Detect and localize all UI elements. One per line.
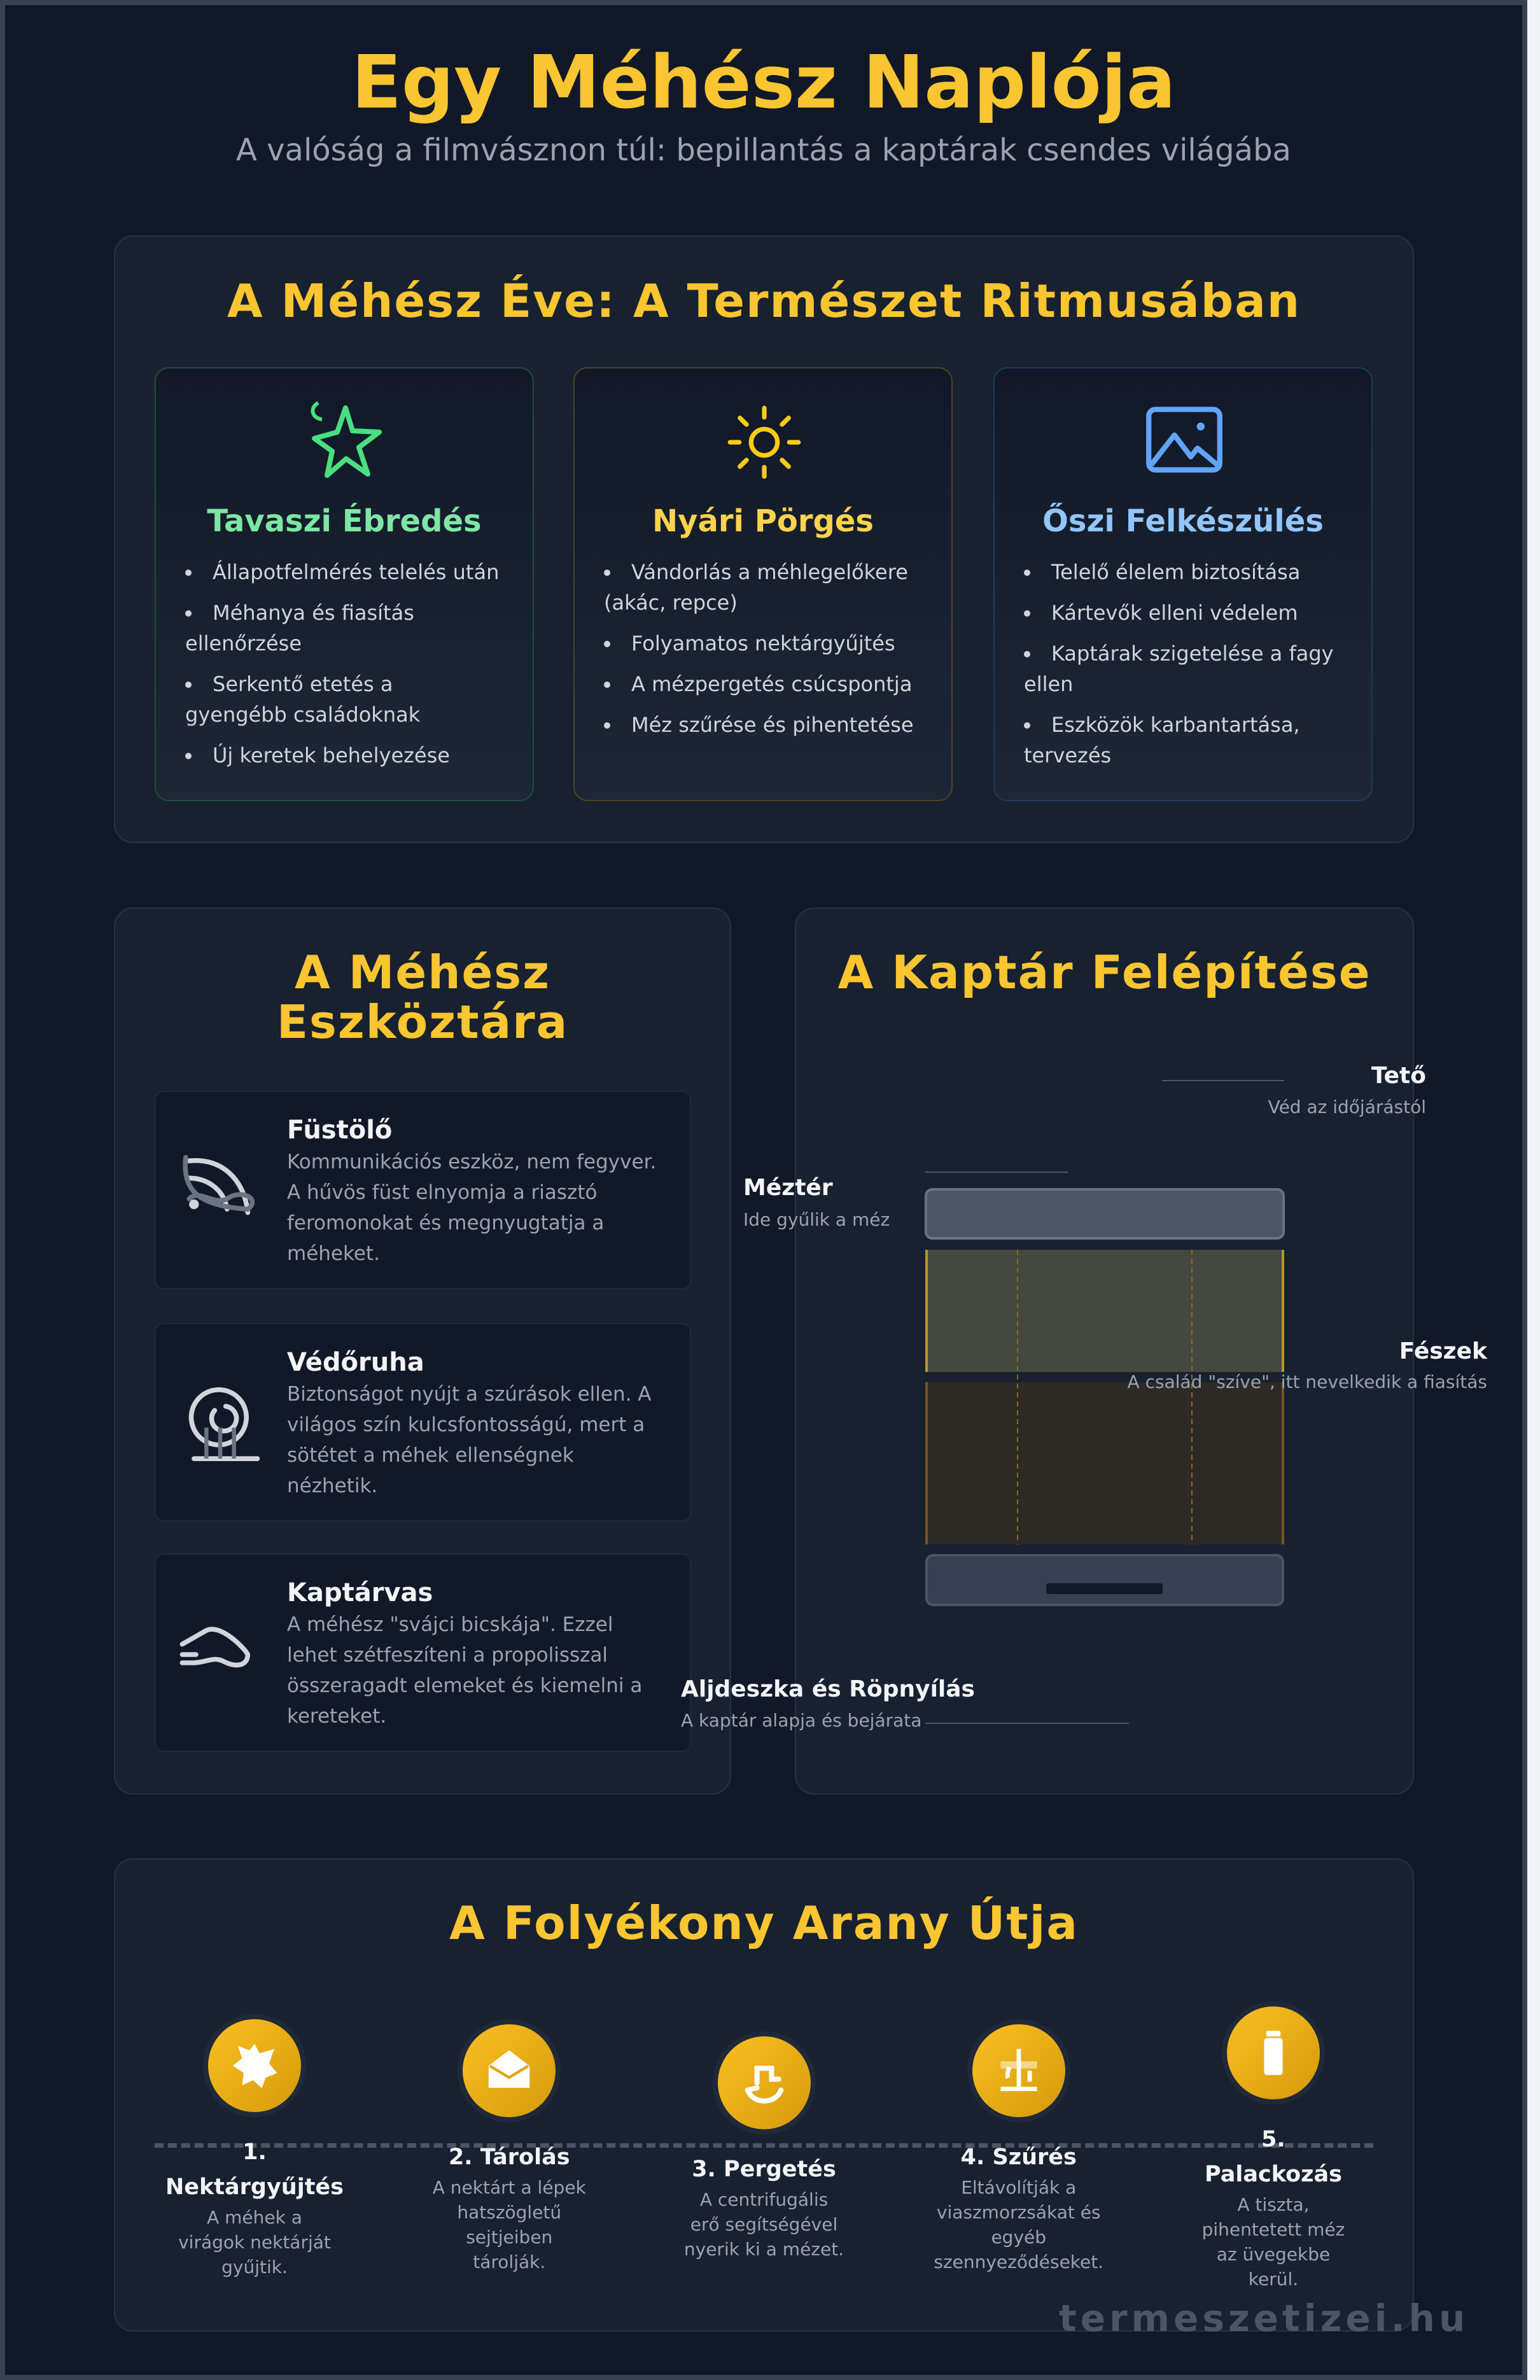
tool: suit: sötétet a méhek ellenségnek	[287, 1444, 574, 1467]
step 1: 1.	[242, 2139, 267, 2165]
step 2: hatszögletű	[457, 2202, 561, 2222]
tool: smoker: Füstölő	[287, 1116, 392, 1145]
text: Véd az időjárástól	[1268, 1096, 1426, 1117]
card: autumn: Telelő élelem biztosítása	[1051, 560, 1300, 584]
step 1: A méhek a	[207, 2207, 302, 2227]
icon: sun	[728, 406, 801, 479]
icon: sprout star	[311, 401, 382, 478]
step 2: tárolják.	[473, 2251, 545, 2272]
step 2: sejtjeiben	[466, 2226, 552, 2248]
tool: hive tool: Kaptárvas	[287, 1578, 433, 1607]
step 3: A centrifugális	[700, 2189, 828, 2210]
step 5: Palackozás	[1205, 2162, 1342, 2187]
icon: veil	[188, 1387, 260, 1461]
tool: suit: nézhetik.	[287, 1474, 377, 1497]
step 4	[934, 2024, 1103, 2272]
text: Ide gyűlik a méz	[743, 1209, 890, 1230]
step 5: A tiszta,	[1237, 2194, 1310, 2215]
tool: smoker: Kommunikációs eszköz, nem fegyver.	[287, 1151, 656, 1173]
tool: smoker	[155, 1091, 691, 1289]
step 1	[165, 2019, 344, 2277]
label: brood: Fészek	[1399, 1338, 1487, 1364]
text: A kaptár alapja és bejárata	[681, 1710, 921, 1731]
card: autumn	[993, 367, 1373, 801]
step 5	[1202, 2006, 1345, 2290]
card: spring: Állapotfelmérés telelés után	[213, 560, 499, 584]
step 1: Nektárgyűjtés	[165, 2174, 344, 2199]
panel: tools	[114, 907, 731, 1795]
tool: suit	[155, 1323, 691, 1522]
heading: hive: A Kaptár Felépítése	[837, 946, 1371, 999]
step 4: egyéb	[991, 2226, 1046, 2248]
subtitle: A valóság a filmvásznon túl: bepillantás a kaptárak csendes világába	[236, 132, 1291, 168]
card: autumn: Kaptárak szigetelése a fagy ellen	[1024, 641, 1334, 696]
label: honey super: Méztér	[743, 1175, 833, 1201]
card: autumn: Kártevők elleni védelem	[1051, 601, 1298, 625]
tool: hive tool: lehet szétfeszíteni a propolisszal	[287, 1644, 608, 1667]
tool: hive tool: kereteket.	[287, 1705, 386, 1728]
card: autumn: Őszi Felkészülés	[1042, 503, 1324, 539]
card: summer: Vándorlás a méhlegelőkere (akác, repce)	[604, 560, 908, 615]
heading: tools: A Méhész	[295, 946, 550, 999]
step 4: szennyeződéseket.	[934, 2251, 1103, 2272]
step 2	[433, 2024, 586, 2272]
panel: honey journey	[114, 1858, 1414, 2332]
step 4: Eltávolítják a	[961, 2176, 1076, 2198]
card: autumn: Eszközök karbantartása, tervezés	[1024, 713, 1300, 767]
tool: suit: világos szín kulcsfontosságú, mert a	[287, 1413, 645, 1436]
tool: suit: Biztonságot nyújt a szúrások ellen. A	[287, 1383, 652, 1406]
icon: picture	[1146, 407, 1222, 473]
diagram: hive	[925, 1080, 1285, 1724]
label: bottom board: Aljdeszka és Röpnyílás	[681, 1676, 975, 1702]
card: spring: Méhanya és fiasítás ellenőrzése	[185, 601, 414, 655]
step 1: virágok nektárját	[178, 2231, 331, 2253]
watermark: termeszetizei.hu	[1059, 2297, 1469, 2340]
step 3: 3. Pergetés	[692, 2157, 836, 2182]
tool: smoker: A hűvös füst elnyomja a riasztó	[287, 1181, 597, 1204]
card: spring: Serkentő etetés a gyengébb családoknak	[185, 672, 420, 727]
step 5: kerül.	[1249, 2269, 1298, 2290]
label: roof: Tető	[1371, 1063, 1426, 1089]
card: summer	[573, 367, 953, 801]
panel: seasons	[114, 235, 1414, 843]
step 1: gyűjtik.	[221, 2257, 288, 2277]
tool: smoker: feromonokat és megnyugtatja a	[287, 1212, 604, 1235]
icon: smoker	[183, 1155, 255, 1215]
card: summer: Nyári Pörgés	[652, 503, 874, 539]
steps	[165, 2006, 1345, 2290]
step 4: 4. Szűrés	[961, 2145, 1077, 2170]
tool: hive tool: A méhész "svájci bicskája". Ezzel	[287, 1613, 613, 1636]
card: spring: Tavaszi Ébredés	[207, 503, 482, 539]
tool: hive tool	[155, 1553, 691, 1752]
tool: smoker: méheket.	[287, 1242, 380, 1265]
step 3	[684, 2036, 844, 2260]
heading: tools	[277, 946, 568, 1049]
step 5: az üvegekbe	[1217, 2244, 1330, 2265]
step 3: nyerik ki a mézet.	[684, 2239, 844, 2260]
heading: journey: A Folyékony Arany Útja	[449, 1896, 1079, 1950]
title: Egy Méhész Naplója	[351, 40, 1176, 125]
tool: suit: Védőruha	[287, 1348, 424, 1377]
step 2: A nektárt a lépek	[433, 2176, 586, 2198]
card: summer: A mézpergetés csúcspontja	[631, 672, 912, 696]
card: summer: Méz szűrése és pihentetése	[631, 713, 914, 737]
card: summer: Folyamatos nektárgyűjtés	[631, 631, 895, 655]
step 3: erő segítségével	[690, 2214, 837, 2235]
icon: hive tool	[179, 1627, 251, 1667]
text: A család "szíve", itt nevelkedik a fiasítás	[1128, 1371, 1487, 1392]
panel: hive	[795, 907, 1414, 1795]
tool: hive tool: összeragadt elemeket és kiemelni a	[287, 1674, 642, 1697]
step 5: 5.	[1261, 2127, 1285, 2152]
heading: tools: Eszköztára	[277, 995, 568, 1049]
step 2: 2. Tárolás	[449, 2145, 570, 2170]
card: spring	[155, 367, 534, 801]
heading: seasons: A Méhész Éve: A Természet Ritmusában	[227, 274, 1301, 328]
step 5: pihentetett méz	[1202, 2219, 1345, 2240]
step 4: viaszmorzsákat és	[937, 2202, 1101, 2222]
dashed timeline	[155, 2143, 1373, 2148]
card: spring: Új keretek behelyezése	[213, 743, 450, 767]
